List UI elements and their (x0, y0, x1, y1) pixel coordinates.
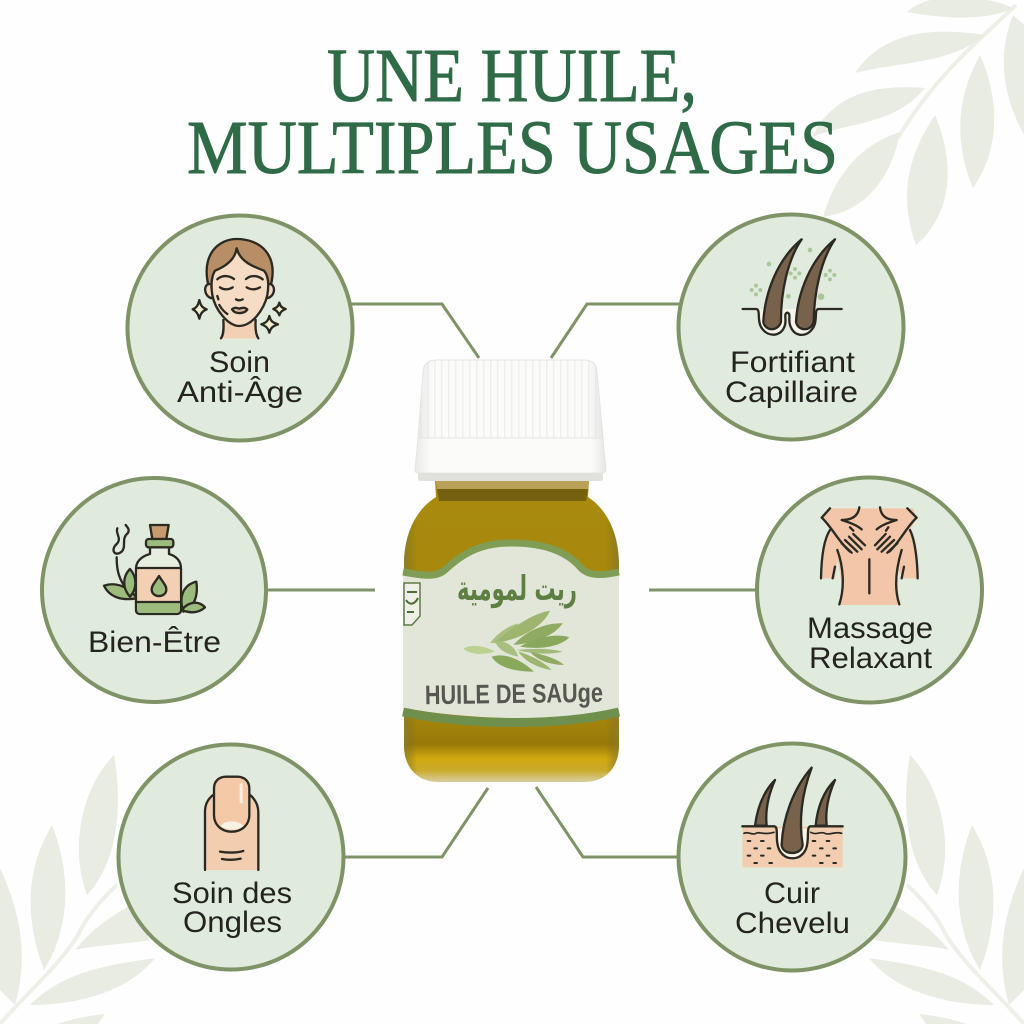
label (172, 877, 292, 939)
decorative leaves: top right (812, 0, 1024, 245)
label: Soin des (172, 877, 292, 910)
panel: Massage Relaxant (757, 478, 982, 702)
connector lines (266, 304, 757, 857)
panel: Bien-Être (42, 478, 266, 702)
label: Ongles (183, 906, 282, 939)
title: MULTIPLES USAGES (187, 106, 838, 190)
label: Soin (209, 346, 270, 379)
label: Relaxant (809, 642, 933, 675)
sage sprig (463, 611, 569, 672)
label: Fortifiant (730, 346, 856, 379)
panel: Fortifiant Capillaire (678, 214, 904, 440)
label logo (404, 583, 420, 625)
label (403, 542, 619, 718)
icon: essential oil bottle (104, 525, 205, 614)
label: Bien-Être (88, 626, 221, 659)
arabic name: ريت لمومية (457, 569, 577, 609)
bottle glass and oil (404, 481, 619, 782)
label (177, 346, 303, 409)
icon: face (193, 239, 286, 338)
label: Massage (807, 612, 933, 645)
icon: scalp section (742, 768, 843, 867)
decorative leaves: bottom left (0, 755, 155, 1024)
label: Chevelu (735, 907, 850, 940)
icon: back massage (821, 507, 918, 605)
label (735, 877, 850, 940)
icon: fingernail (205, 777, 258, 870)
icon: hair follicles (743, 239, 842, 335)
panel: Cuir Chevelu (678, 744, 906, 970)
label: Cuir (764, 877, 820, 910)
label (725, 346, 858, 409)
title: UNE HUILE, (327, 34, 697, 118)
label (807, 612, 933, 675)
label: Capillaire (725, 376, 858, 409)
product: sage oil bottle (403, 360, 619, 782)
cap (418, 360, 603, 438)
title (187, 34, 838, 190)
panel: Soin Anti-Âge (128, 216, 352, 440)
decorative leaves: bottom right (869, 755, 1024, 1024)
label: Anti-Âge (177, 376, 303, 409)
english name: HUILE DE SAUge (425, 678, 603, 710)
panel: Soin des Ongles (118, 744, 344, 970)
